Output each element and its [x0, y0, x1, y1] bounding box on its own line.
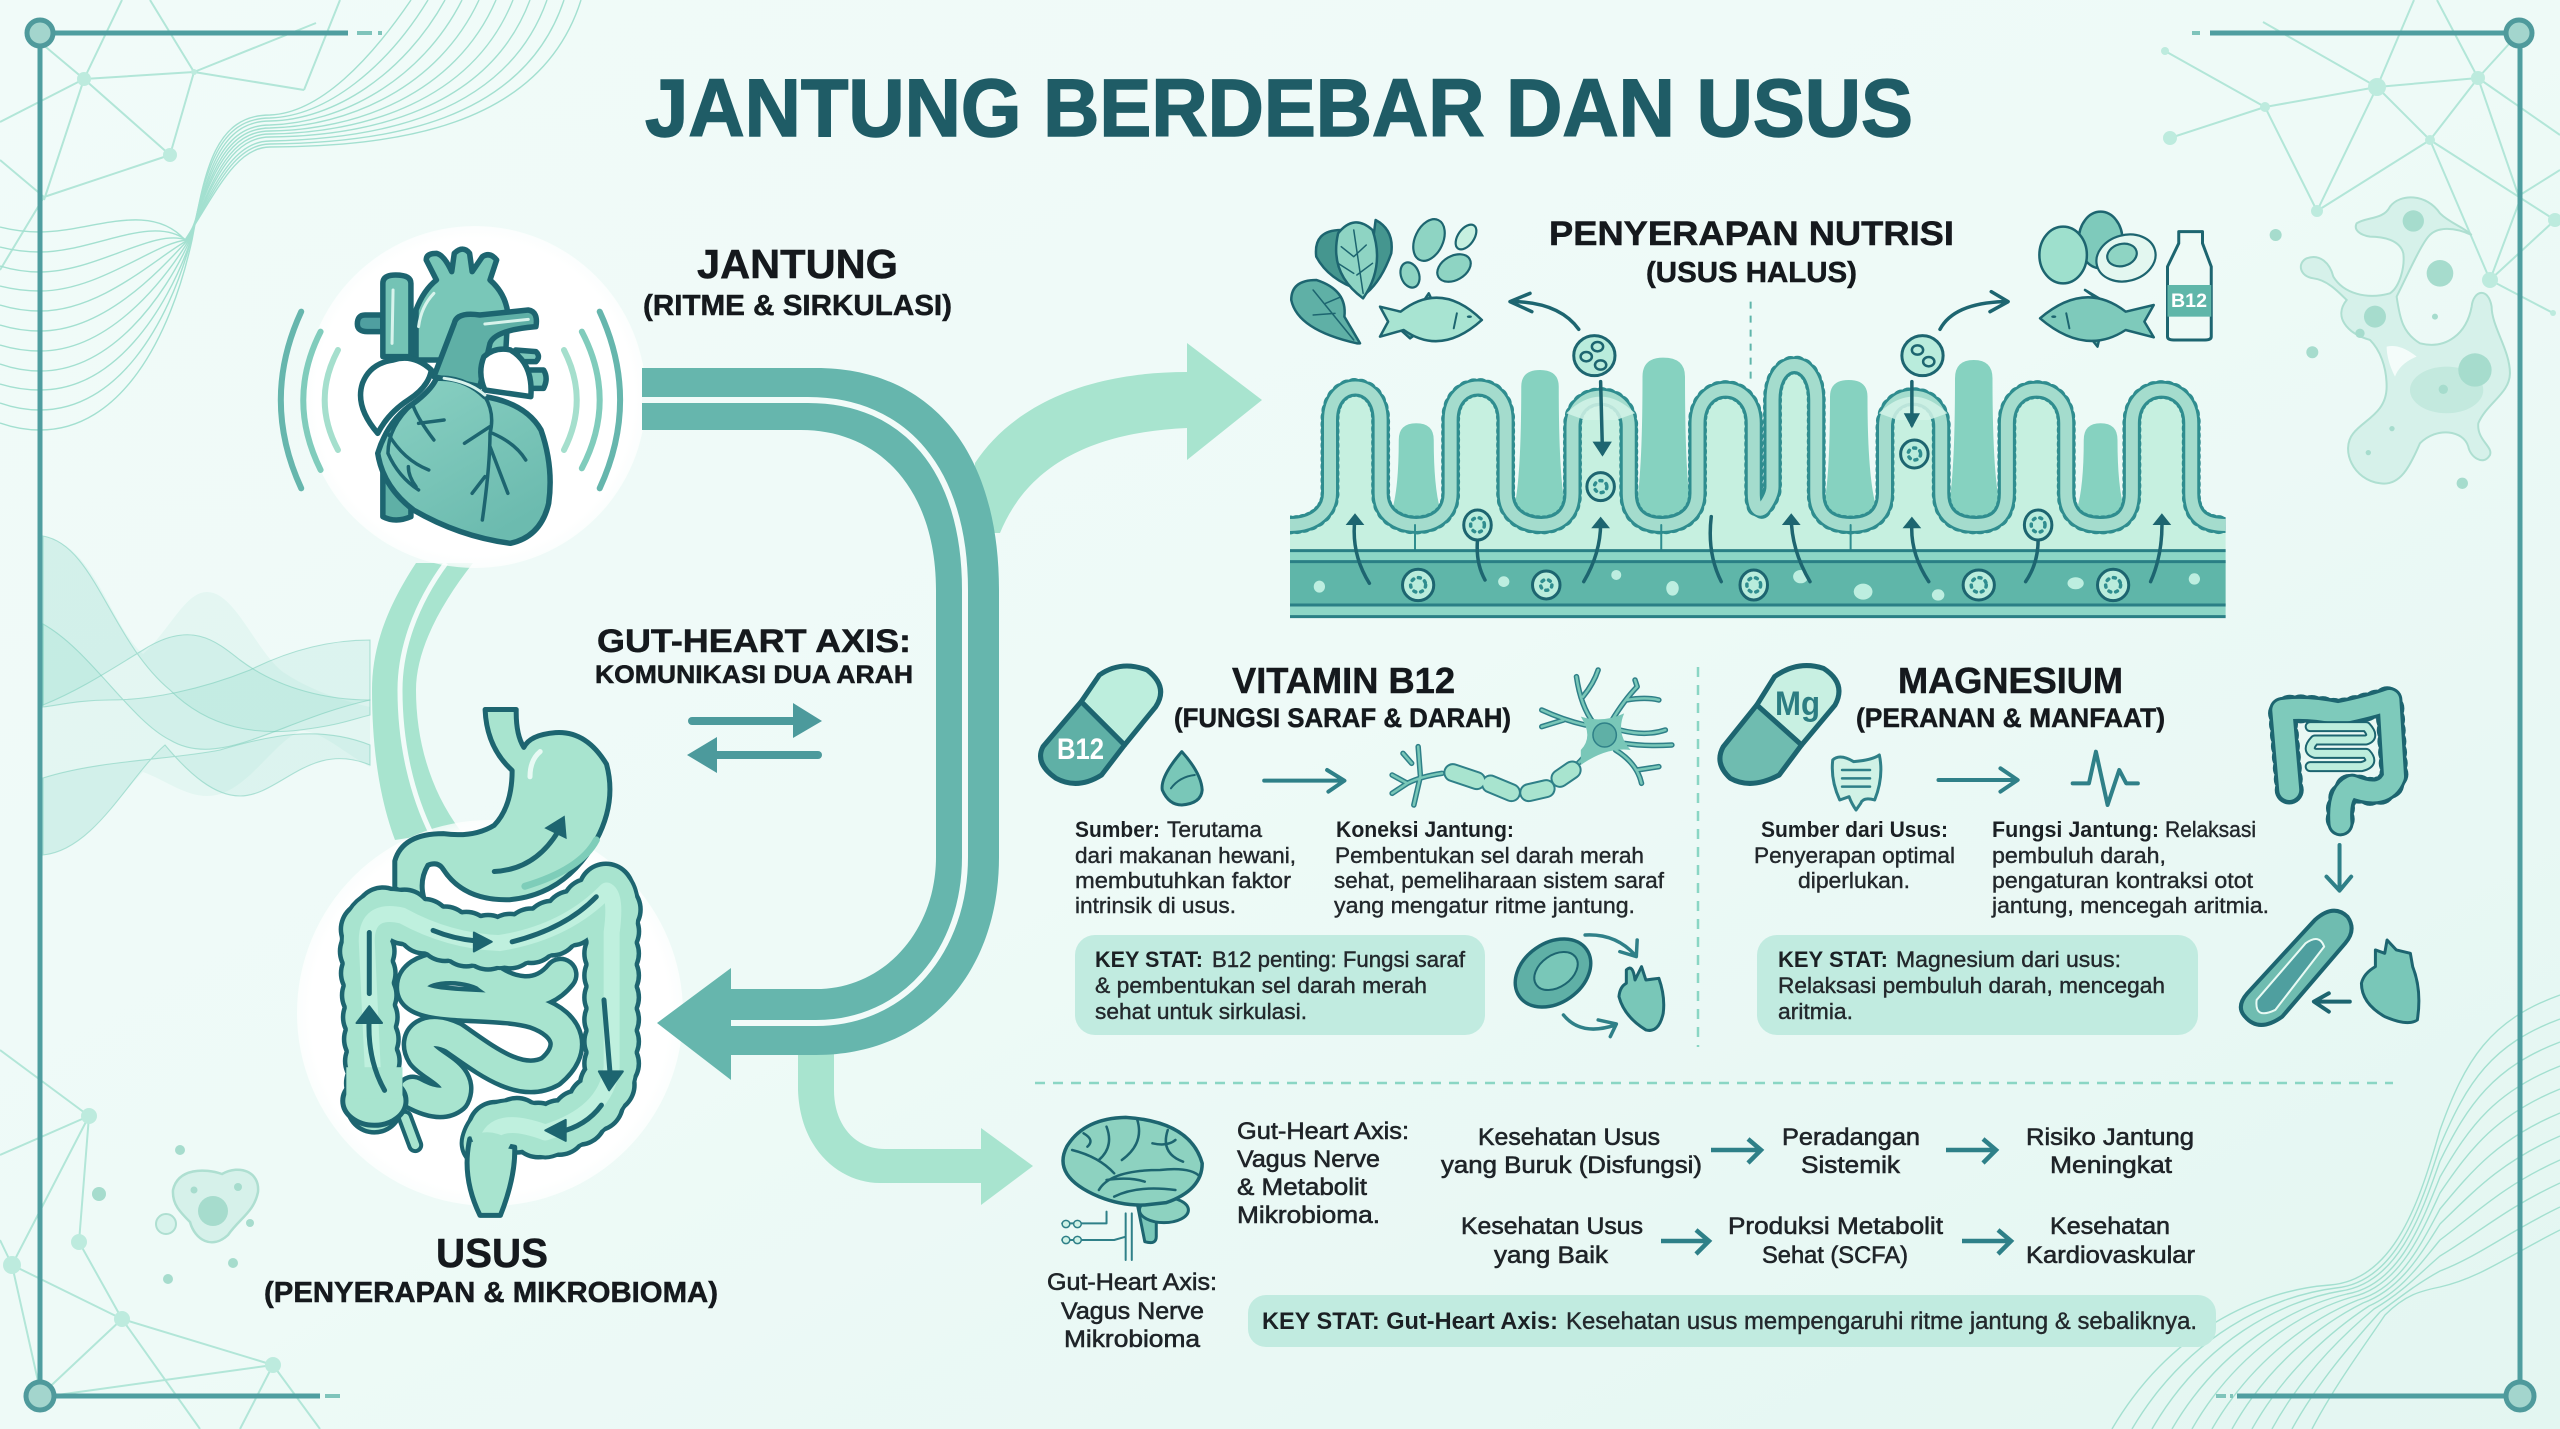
flow: poor gut health: yang Buruk (Disfungsi)	[1441, 1152, 1702, 1179]
decoration: left ribbon wave	[43, 536, 370, 855]
callout: gut-heart axis key stat: Kesehatan usus mempengaruhi ritme jantung & sebaliknya.	[1566, 1308, 2197, 1335]
text: axis summary: Vagus Nerve	[1237, 1146, 1380, 1173]
label: B12 on bottle: B12	[2171, 291, 2207, 312]
callout: magnesium key stat: Magnesium dari usus:	[1896, 947, 2121, 972]
decoration: top-left network	[0, 0, 340, 270]
illustration: intestinal villi	[1290, 292, 2226, 617]
flow: poor gut health: Risiko Jantung	[2026, 1124, 2194, 1151]
decoration: top-left wave lines	[0, 0, 581, 430]
text: gut source	[1754, 817, 1955, 893]
panel: magnesium	[1720, 660, 2419, 1035]
icon: brain	[1062, 1117, 1202, 1260]
text: gut source: Penyerapan optimal	[1754, 843, 1955, 868]
icons: capsule, drop, neuron, heart	[1041, 666, 1672, 1037]
text: axis summary: Mikrobioma.	[1237, 1202, 1380, 1229]
text: gut source: diperlukan.	[1798, 868, 1910, 893]
subheading: Komunikasi dua arah: KOMUNIKASI DUA ARAH	[595, 661, 913, 689]
subheading: Penyerapan & Mikrobioma: (PENYERAPAN & MIKROBIOMA)	[264, 1277, 718, 1309]
title: JANTUNG BERDEBAR DAN USUS	[645, 63, 1913, 154]
flow: good gut health: Kesehatan Usus	[1461, 1213, 1643, 1240]
text: heart function: Fungsi Jantung:	[1992, 817, 2159, 842]
decoration: microbe blob top-right	[2270, 197, 2510, 489]
icon: milk bottle	[2168, 232, 2211, 340]
arrows: pathway flow	[1661, 1139, 2011, 1254]
text: source: Sumber:	[1075, 817, 1160, 842]
flow: poor gut health	[1441, 1124, 2194, 1179]
icons: capsule, gut, pulse, bacterium, heart	[1720, 666, 2419, 1025]
icon: heart with pulse arcs	[281, 249, 620, 543]
decoration: small microbe bottom-left	[92, 1145, 258, 1284]
icon: halved egg	[2091, 228, 2161, 288]
text: heart connection	[1334, 817, 1665, 918]
decoration: top-right network	[2161, 0, 2560, 316]
callout: magnesium key stat: KEY STAT:	[1778, 947, 1888, 972]
panel: nutrient absorption	[1290, 212, 2226, 617]
flow: poor gut health: Meningkat	[2050, 1152, 2172, 1179]
text: source: intrinsik di usus.	[1075, 893, 1236, 918]
subheading: Ritme & Sirkulasi: (RITME & SIRKULASI)	[643, 290, 952, 322]
flow: poor gut health: Kesehatan Usus	[1478, 1124, 1660, 1151]
text: brain caption: Vagus Nerve	[1061, 1298, 1204, 1325]
text: source: dari makanan hewani,	[1075, 843, 1296, 868]
heading: Magnesium: MAGNESIUM	[1898, 660, 2123, 701]
arrow: main teal arch heart to gut	[642, 368, 999, 1080]
flow: good gut health: yang Baik	[1494, 1242, 1609, 1269]
text: source: Terutama	[1167, 817, 1263, 842]
text: axis summary	[1237, 1118, 1409, 1229]
heading: Usus: USUS	[436, 1230, 548, 1276]
label: B12 on capsule: B12	[1057, 733, 1104, 766]
icon: red blood cell	[1502, 925, 1604, 1021]
decoration: bottom-left network	[0, 1050, 320, 1429]
arrow: light arc heart to gut	[372, 563, 473, 840]
text: brain caption: Mikrobioma	[1064, 1326, 1201, 1353]
callout: magnesium key stat: Relaksasi pembuluh darah, mencegah	[1778, 973, 2165, 998]
icon: stomach and intestines	[343, 709, 623, 1215]
text: heart function: pengaturan kontraksi otot	[1992, 868, 2253, 893]
callout: B12 key stat: sehat untuk sirkulasi.	[1095, 999, 1307, 1024]
flow: good gut health: Kesehatan	[2050, 1213, 2170, 1240]
text: source	[1075, 817, 1296, 918]
flow: poor gut health: Sistemik	[1801, 1152, 1901, 1179]
text: gut source: Sumber dari Usus:	[1761, 817, 1948, 842]
flow: good gut health: Kardiovaskular	[2026, 1242, 2195, 1269]
icon: nuts and seeds	[1397, 214, 1481, 290]
text: source: membutuhkan faktor	[1075, 868, 1291, 893]
callout: B12 key stat: B12 penting: Fungsi saraf	[1212, 947, 1466, 972]
panel: vitamin B12	[1041, 660, 1672, 1037]
callout: gut-heart axis key stat	[1248, 1295, 2216, 1347]
flow: good gut health: Sehat (SCFA)	[1762, 1242, 1908, 1269]
text: heart connection: sehat, pemeliharaan sistem saraf	[1334, 868, 1665, 893]
arrow: light down to gut-heart axis	[798, 1050, 1033, 1205]
subheading: Usus Halus: (USUS HALUS)	[1646, 257, 1857, 289]
text: heart function	[1991, 817, 2269, 918]
heading: Penyerapan Nutrisi: PENYERAPAN NUTRISI	[1549, 215, 1954, 253]
decoration: bottom-right wave lines	[2112, 995, 2560, 1429]
text: brain caption: Gut-Heart Axis:	[1047, 1269, 1217, 1296]
text: heart connection: Koneksi Jantung:	[1336, 817, 1514, 842]
flow: poor gut health: Peradangan	[1782, 1124, 1920, 1151]
text: heart connection: Pembentukan sel darah merah	[1335, 843, 1644, 868]
label: Mg on capsule: Mg	[1775, 685, 1820, 723]
icon: leafy greens and fish	[1291, 212, 2211, 347]
text: heart function: pembuluh darah,	[1992, 843, 2166, 868]
flow: good gut health: Produksi Metabolit	[1728, 1213, 1943, 1240]
callout: B12 key stat	[1075, 935, 1485, 1035]
callout: B12 key stat: KEY STAT:	[1095, 947, 1203, 972]
callout: gut-heart axis key stat: KEY STAT: Gut-Heart Axis:	[1262, 1308, 1558, 1335]
gut circle background	[297, 820, 683, 1206]
text: axis summary: Gut-Heart Axis:	[1237, 1118, 1409, 1145]
callout: magnesium key stat: aritmia.	[1778, 999, 1853, 1024]
callout: B12 key stat: & pembentukan sel darah merah	[1095, 973, 1427, 998]
heading: Vitamin B12: VITAMIN B12	[1232, 660, 1455, 701]
flow: good gut health	[1461, 1213, 2195, 1269]
text: heart connection: yang mengatur ritme jantung.	[1334, 893, 1635, 918]
arrow: light up to nutrient absorption	[975, 343, 1262, 533]
heart circle background	[304, 226, 646, 568]
text: heart function: Relaksasi	[2165, 817, 2256, 842]
subheading: fungsi saraf dan darah: (FUNGSI SARAF & DARAH)	[1174, 703, 1511, 733]
heading: Gut-Heart Axis: GUT-HEART AXIS:	[597, 623, 911, 659]
text: brain caption	[1047, 1269, 1217, 1353]
text: heart function: jantung, mencegah aritmia.	[1991, 893, 2269, 918]
heading: Jantung: JANTUNG	[697, 241, 898, 287]
subheading: peranan dan manfaat: (PERANAN & MANFAAT)	[1856, 703, 2165, 733]
icon: two-way arrows	[687, 703, 822, 773]
callout: magnesium key stat	[1757, 935, 2198, 1035]
text: axis summary: & Metabolit	[1237, 1174, 1367, 1201]
panel: gut-heart axis pathways	[1047, 1117, 2216, 1353]
